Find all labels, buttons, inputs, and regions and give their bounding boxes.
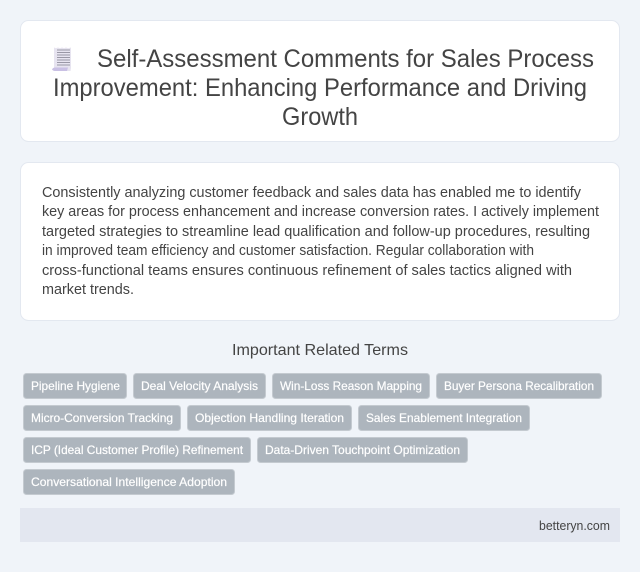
paragraph text: Consistently analyzing customer feedback and sales data has enabled me to identify	[42, 185, 582, 201]
heading: important related terms: Important Related Terms	[232, 342, 408, 359]
tag	[24, 470, 234, 494]
paragraph text: cross-functional teams ensures continuous refinement of sales tactics aligned with	[42, 263, 572, 279]
title	[53, 45, 594, 131]
footer credit: betteryn.com	[539, 518, 610, 533]
tag: Sales Enablement Integration	[366, 411, 522, 425]
tag: Micro-Conversion Tracking	[31, 411, 173, 425]
tag	[24, 374, 126, 398]
tag: Objection Handling Iteration	[195, 411, 344, 425]
tag	[188, 406, 352, 430]
footer bar	[20, 508, 620, 542]
paragraph text: key areas for process enhancement and increase conversion rates. I actively implement	[42, 204, 599, 220]
paragraph text	[42, 185, 599, 298]
tag: ICP (Ideal Customer Profile) Refinement	[31, 443, 244, 457]
tag: Win-Loss Reason Mapping	[280, 379, 422, 393]
tags: related terms	[24, 374, 602, 494]
tag	[436, 374, 602, 398]
tag: Deal Velocity Analysis	[141, 379, 258, 393]
paragraph text: in improved team efficiency and customer satisfaction. Regular collaboration with	[42, 243, 534, 259]
tag: Buyer Persona Recalibration	[444, 379, 594, 393]
paragraph text: targeted strategies to streamline lead qualification and follow-up procedures, resulting	[42, 224, 590, 240]
tag: Conversational Intelligence Adoption	[31, 475, 227, 489]
panel: title card	[20, 20, 620, 142]
tag	[24, 438, 250, 462]
tag	[358, 406, 530, 430]
icon: receipt document	[52, 48, 71, 71]
tag	[134, 374, 266, 398]
title: Improvement: Enhancing Performance and Driving	[53, 74, 587, 102]
tag: Data-Driven Touchpoint Optimization	[265, 443, 460, 457]
tag	[24, 406, 180, 430]
title: Growth	[282, 103, 358, 131]
tag	[258, 438, 468, 462]
tag: Pipeline Hygiene	[31, 379, 120, 393]
tag	[272, 374, 430, 398]
panel: summary paragraph	[20, 162, 620, 320]
title: Self-Assessment Comments for Sales Process	[97, 45, 594, 73]
paragraph text: market trends.	[42, 282, 134, 298]
